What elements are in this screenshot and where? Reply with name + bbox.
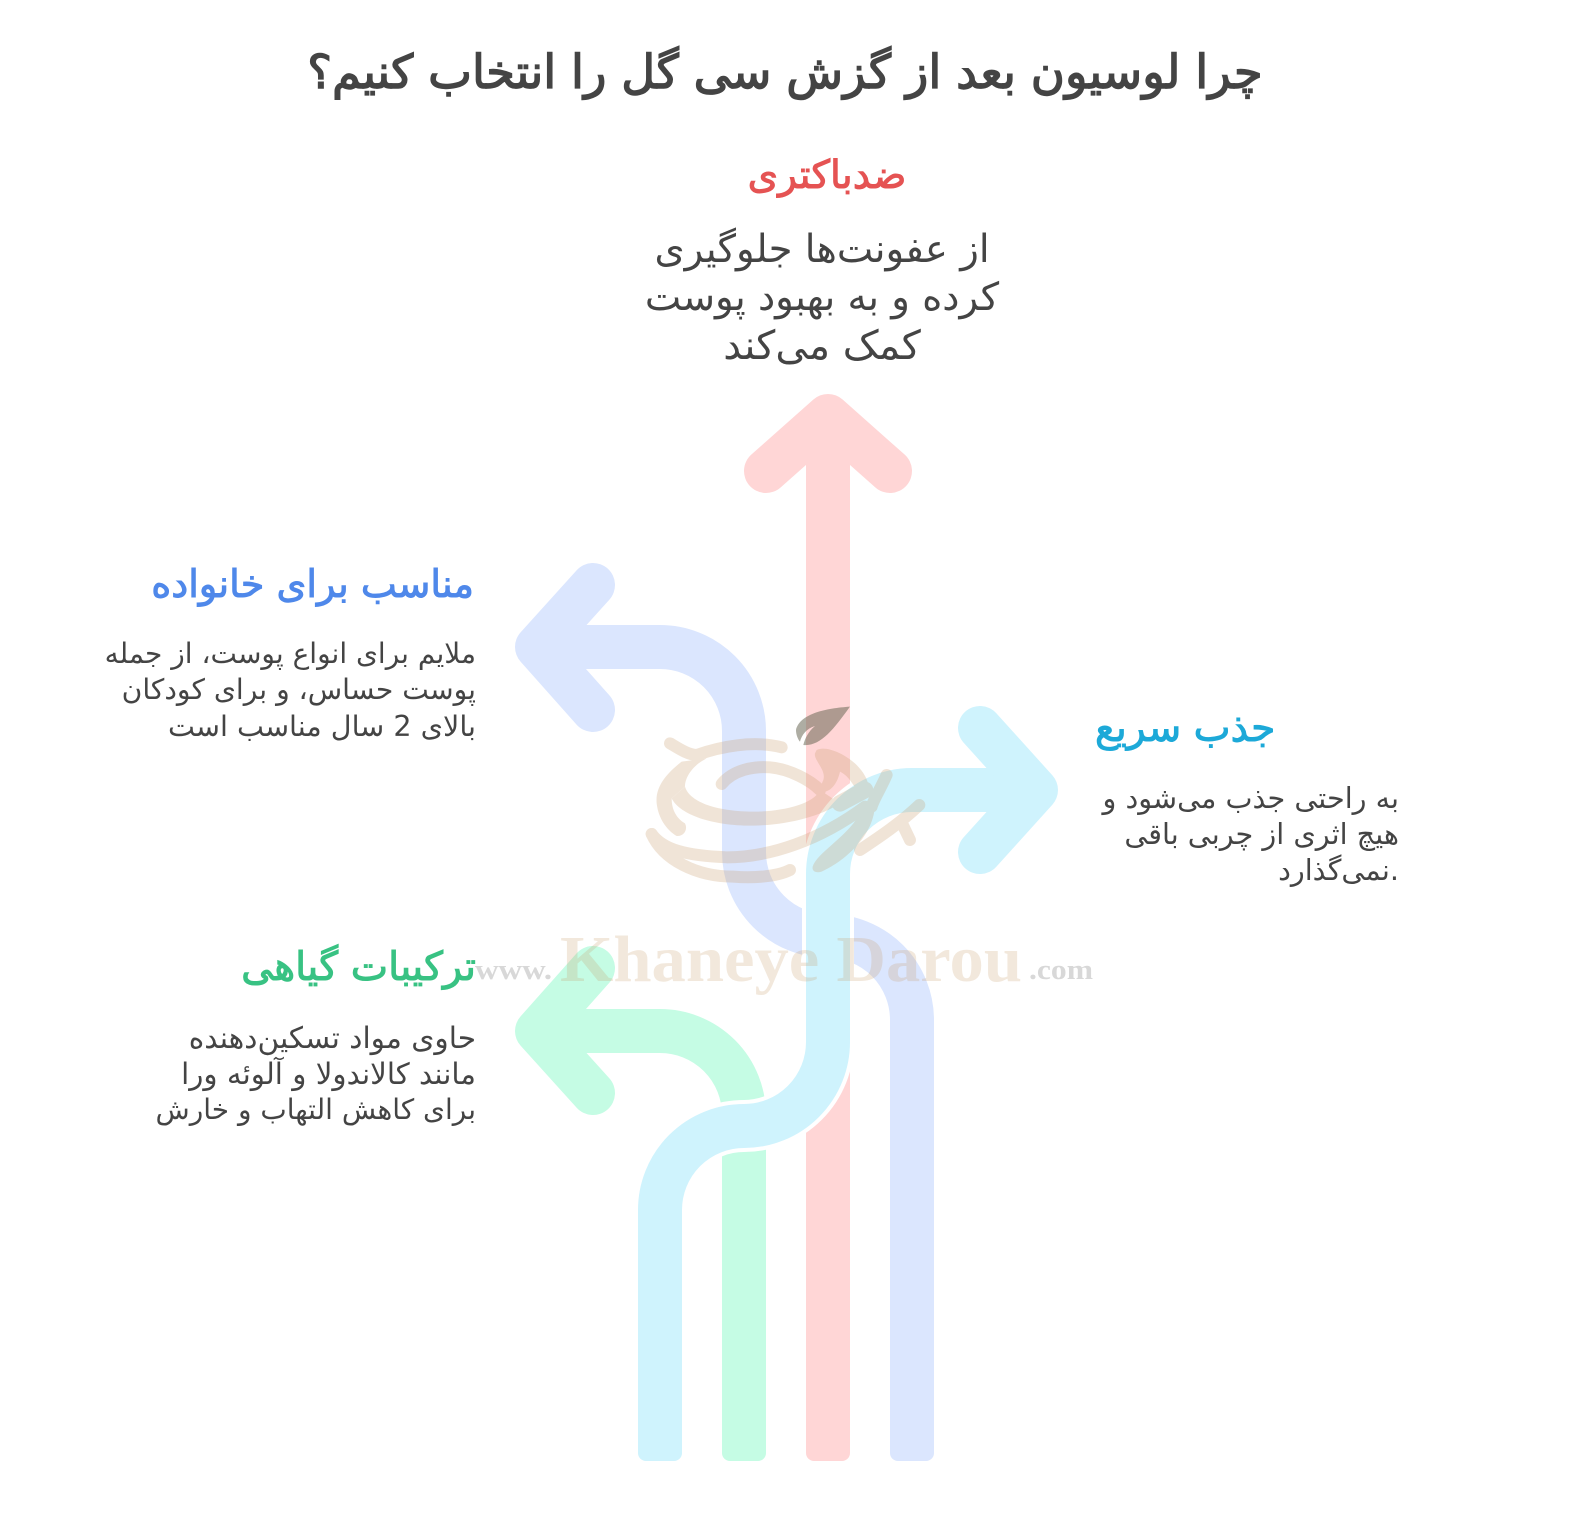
watermark text: Khaneye Darou <box>560 923 1022 996</box>
heading: suitable for family: مناسب برای خانواده <box>151 563 474 607</box>
arrow: cyan, fast absorption <box>638 728 1036 1461</box>
title: چرا لوسیون بعد از گزش سی گل را انتخاب کنیم؟ <box>307 45 1263 99</box>
text: antibacterial description: کمک می‌کند <box>723 323 921 369</box>
heading: fast absorption: جذب سریع <box>1095 706 1275 751</box>
text: suitable for family description: پوست حساس، و برای کودکان <box>122 673 476 706</box>
heading: antibacterial: ضدباکتری <box>748 153 906 198</box>
arrow: red, antibacterial <box>766 416 890 1461</box>
logo: leaf <box>796 707 850 745</box>
watermark logo <box>652 707 919 877</box>
text: antibacterial description: کرده و به بهبود پوست <box>645 275 999 320</box>
text: herbal ingredients description: مانند کالاندولا و آلوئه ورا <box>181 1057 476 1091</box>
text: antibacterial description: از عفونت‌ها جلوگیری <box>654 227 990 272</box>
heading: herbal ingredients: ترکیبات گیاهی <box>241 944 476 990</box>
text: fast absorption description <box>1101 781 1399 887</box>
watermark text: .com <box>1029 954 1093 986</box>
text: suitable for family description: بالای 2 سال مناسب است <box>168 709 476 743</box>
text: fast absorption description: نمی‌گذارد. <box>1278 853 1399 887</box>
logo: nest swirl <box>652 743 919 877</box>
watermark text: www. <box>475 954 552 986</box>
text: herbal ingredients description <box>156 1021 476 1126</box>
text: fast absorption description: هیچ اثری از چربی باقی <box>1124 817 1399 851</box>
text: suitable for family description: ملایم برای انواع پوست، از جمله <box>105 637 476 670</box>
text: herbal ingredients description: برای کاهش التهاب و خارش <box>156 1093 476 1126</box>
text: fast absorption description: به راحتی جذب می‌شود و <box>1102 781 1399 815</box>
text: antibacterial description <box>645 227 1000 369</box>
arrow: blue, suitable for family <box>537 585 934 1461</box>
text: herbal ingredients description: حاوی مواد تسکین‌دهنده <box>189 1021 476 1055</box>
text: suitable for family description <box>105 637 476 743</box>
arrow: green, herbal ingredients <box>537 968 766 1461</box>
